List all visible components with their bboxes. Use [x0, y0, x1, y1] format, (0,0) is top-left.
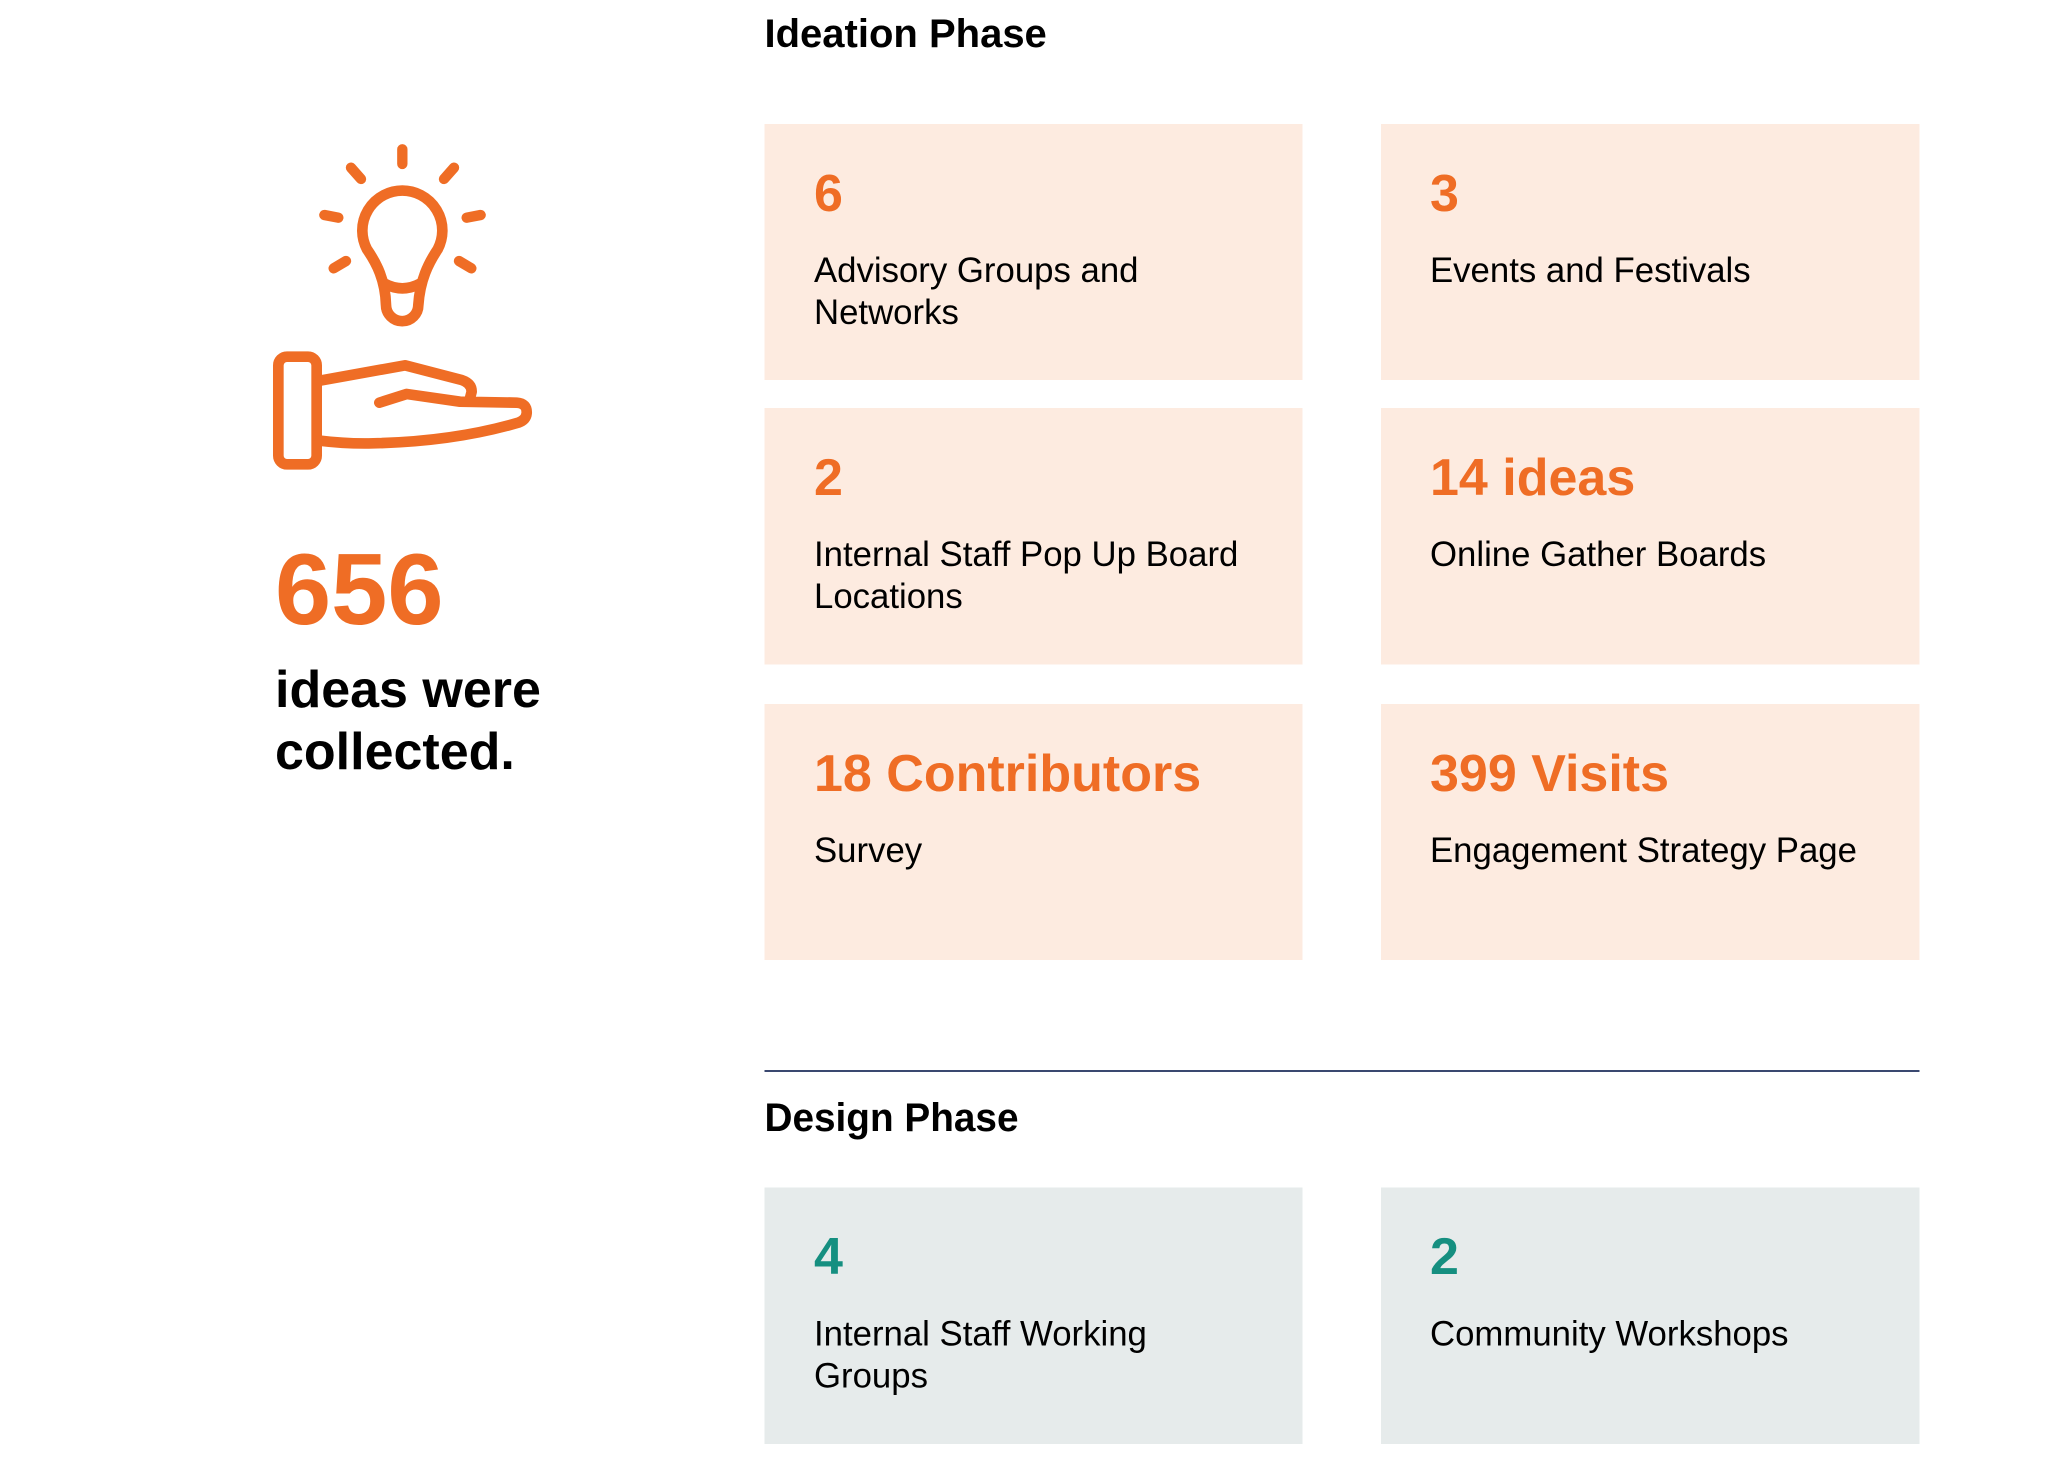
panel: Survey: Survey [814, 832, 923, 870]
panel: Online Gather Boards [1381, 408, 1920, 664]
heading: Design Phase: Design Phase [764, 1096, 1018, 1140]
panel: Internal Staff Pop Up Board Locations [764, 408, 1302, 664]
stat: 656: 656 [275, 534, 444, 646]
panel: Advisory Groups and Networks: Advisory Groups and [814, 252, 1138, 290]
icon: light rays [324, 149, 481, 268]
panel: Internal Staff Pop Up Board Locations: Locations [814, 578, 963, 616]
panel: Internal Staff Working Groups: 4 [814, 1228, 843, 1286]
stat caption: ideas were [275, 661, 541, 719]
panel: Online Gather Boards: 14 ideas [1430, 449, 1635, 507]
icon: hand holding light bulb [278, 149, 527, 464]
headline stat [275, 534, 541, 781]
stat caption [275, 661, 541, 781]
panel: Internal Staff Pop Up Board Locations: Internal Staff Pop Up Board [814, 536, 1238, 574]
panel: Survey [764, 704, 1302, 960]
panel: Online Gather Boards: Online Gather Boards [1430, 536, 1766, 574]
panel: Internal Staff Pop Up Board Locations: 2 [814, 449, 843, 507]
panel: Events and Festivals: Events and Festivals [1430, 252, 1751, 290]
panel: Community Workshops [1381, 1188, 1920, 1444]
panel: Advisory Groups and Networks: Networks [814, 294, 959, 332]
panel: Community Workshops: Community Workshops [1430, 1316, 1789, 1354]
panel: Internal Staff Working Groups [764, 1188, 1302, 1444]
panel: Advisory Groups and Networks: 6 [814, 165, 843, 223]
panel: Internal Staff Working Groups: Groups [814, 1358, 928, 1396]
panel: Advisory Groups and Networks [764, 124, 1302, 380]
heading: Ideation Phase: Ideation Phase [764, 12, 1047, 56]
icon: hand [278, 357, 527, 464]
icon: bulb [362, 191, 442, 321]
panel: Engagement Strategy Page [1381, 704, 1920, 960]
panel: Events and Festivals [1381, 124, 1920, 380]
panel: Community Workshops: 2 [1430, 1228, 1459, 1286]
panel: Survey: 18 Contributors [814, 745, 1201, 803]
stat caption: collected. [275, 723, 515, 781]
panel: Events and Festivals: 3 [1430, 165, 1459, 223]
panel: Engagement Strategy Page: 399 Visits [1430, 745, 1669, 803]
panel: Internal Staff Working Groups: Internal Staff Working [814, 1316, 1147, 1354]
panel: Engagement Strategy Page: Engagement Strategy Page [1430, 832, 1857, 870]
